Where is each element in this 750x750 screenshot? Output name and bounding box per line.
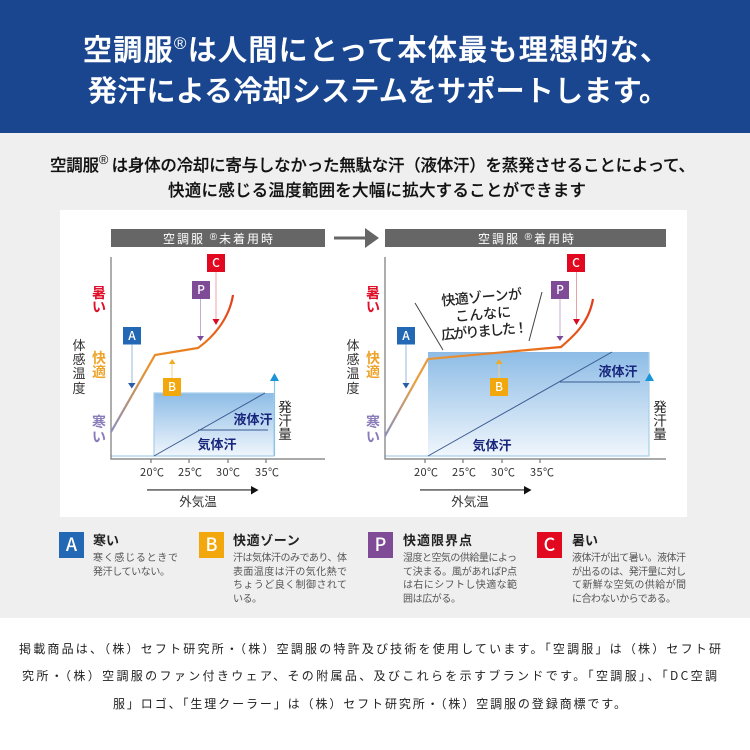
- legend text: に合わないからである。: [572, 590, 676, 605]
- intro text: 快適に感じる温度範囲を大幅に拡大することができます: [168, 177, 586, 201]
- callout: comfort zone expanded: [415, 283, 542, 350]
- callout: comfort zone expanded: 広がりました！: [440, 317, 529, 345]
- badge P: [192, 281, 210, 341]
- label: liquid sweat: 液体汗: [233, 409, 273, 428]
- legend text: 表面温度は汗の気化熱で: [233, 563, 347, 578]
- chart heading bar: 着用時: [534, 230, 574, 247]
- badge B: [490, 359, 508, 396]
- x axis tick labels: 35℃: [255, 464, 279, 480]
- label: body temperature: 感: [72, 349, 86, 368]
- label: body temperature: [72, 335, 86, 397]
- badge A: A: [128, 327, 136, 344]
- chart heading bar: [111, 229, 325, 247]
- badge C: [567, 254, 585, 325]
- intro text: ®: [99, 152, 109, 167]
- icon: B: B: [205, 531, 218, 557]
- icon: P: P: [375, 531, 386, 557]
- labels: hot comfortable cold: い: [366, 297, 380, 317]
- legend text: 囲は広がる。: [403, 590, 461, 605]
- labels: hot comfortable cold: 寒: [92, 412, 106, 432]
- chart heading bar: [385, 229, 666, 247]
- badge A: [123, 327, 141, 388]
- labels: hot comfortable cold: 適: [92, 362, 106, 382]
- sweat arrow: [645, 373, 654, 381]
- labels: hot comfortable cold: 快: [92, 348, 106, 368]
- title line 1: 空調服: [83, 27, 173, 69]
- panel: gray background: [0, 133, 750, 618]
- label: sweat amount: 発: [653, 396, 667, 416]
- labels: hot comfortable cold: 適: [366, 362, 380, 382]
- label: body temperature: 度: [72, 378, 86, 397]
- labels: hot comfortable cold: 寒: [366, 412, 380, 432]
- labels: hot comfortable cold: い: [92, 427, 106, 447]
- icon: P: [368, 531, 393, 558]
- icon: C: [537, 531, 562, 558]
- label: vapor sweat: 気体汗: [472, 435, 512, 454]
- labels: hot comfortable cold: い: [366, 427, 380, 447]
- badge A: [397, 327, 415, 388]
- sweat lines: [154, 393, 268, 456]
- x axis tick labels: 25℃: [178, 464, 202, 480]
- badge B: [163, 359, 181, 396]
- legend text: [403, 549, 517, 605]
- legend: A cold: [59, 530, 178, 578]
- legend text: [93, 549, 178, 578]
- label: sweat amount: 汗: [653, 410, 667, 430]
- legend text: 発汗していない。: [93, 563, 170, 578]
- icon: A: A: [66, 531, 78, 557]
- label: sweat amount: [653, 396, 667, 443]
- callout: comfort zone expanded: こんなに: [454, 302, 512, 326]
- chart heading bar: ®: [520, 232, 533, 243]
- badge B: B: [168, 378, 176, 395]
- legend text: 液体汗が出て暑い。液体汗: [572, 549, 686, 564]
- label: sweat amount: [278, 396, 292, 443]
- label: liquid sweat: 液体汗: [598, 361, 638, 380]
- legend text: 湿度と空気の供給量によっ: [403, 549, 517, 564]
- legend text: いる。: [233, 590, 262, 605]
- labels: hot comfortable cold: [92, 283, 106, 447]
- labels: hot comfortable cold: 暑: [92, 283, 106, 303]
- label: vapor sweat: 気体汗: [197, 434, 237, 453]
- title line 1: は人間にとって本体最も理想的な、: [188, 27, 669, 69]
- badge A: A: [402, 327, 410, 344]
- legend: P comfort limit: [368, 530, 517, 605]
- legend text: は右にシフトし快適な範: [403, 576, 517, 591]
- labels: hot comfortable cold: [366, 283, 380, 447]
- axes: [385, 257, 666, 463]
- footer trademark note: [19, 640, 721, 712]
- label: body temperature: 温: [72, 363, 86, 382]
- legend text: [572, 549, 686, 605]
- legend text: [233, 549, 347, 605]
- legend heading: 暑い: [572, 530, 598, 549]
- badge B: B: [495, 378, 503, 395]
- label: body temperature: 体: [72, 335, 86, 354]
- footer trademark note: 服」ロゴ、「生理クーラー」は（株）セフト研究所・（株）空調服の登録商標です。: [113, 695, 626, 712]
- intro text: [50, 152, 695, 201]
- axes: [111, 257, 325, 463]
- badge P: P: [556, 281, 564, 298]
- footer trademark note: 掲載商品は、（株）セフト研究所・（株）空調服の特許及び技術を使用しています。「空調服」は（株）セフト研: [19, 640, 721, 657]
- legend heading: 快適限界点: [403, 530, 473, 549]
- badge C: C: [212, 254, 220, 271]
- x axis tick labels: [414, 464, 554, 480]
- chart heading bar: 未着用時: [219, 230, 273, 247]
- chart: with cooling clothes: [346, 229, 667, 510]
- legend heading: 寒い: [93, 530, 119, 549]
- label: body temperature: 度: [346, 378, 360, 397]
- x axis tick labels: 20℃: [140, 464, 164, 480]
- panel: chart background: [60, 210, 687, 517]
- label: sweat amount: 発: [278, 396, 292, 416]
- badge P: P: [197, 281, 205, 298]
- legend text: が出るのは、発汗量に対し: [572, 563, 686, 578]
- badge P: [551, 281, 569, 341]
- labels: hot comfortable cold: 快: [366, 348, 380, 368]
- legend: B comfort zone: [199, 530, 347, 605]
- x axis arrow: [420, 486, 532, 494]
- header banner: [0, 0, 750, 133]
- legend text: 寒く感じるときで: [93, 549, 178, 564]
- chart heading bar: ®: [205, 232, 218, 243]
- icon: C: C: [544, 531, 556, 557]
- chart heading bar: 空調服: [163, 230, 203, 247]
- sweat lines: [428, 352, 640, 456]
- label: sweat amount: 量: [653, 423, 667, 443]
- intro text: は身体の冷却に寄与しなかった無駄な汗（液体汗）を蒸発させることによって、: [108, 152, 695, 176]
- labels: hot comfortable cold: 暑: [366, 283, 380, 303]
- badge C: [207, 254, 225, 325]
- label: body temperature: [346, 335, 360, 397]
- intro text: 空調服: [50, 152, 99, 176]
- labels: hot comfortable cold: い: [92, 297, 106, 317]
- callout: comfort zone expanded: 快適ゾーンが: [440, 284, 523, 311]
- sweat arrow: [270, 373, 279, 456]
- legend heading: 快適ゾーン: [233, 530, 300, 549]
- label: sweat amount: 汗: [278, 410, 292, 430]
- x axis arrow: [147, 486, 258, 494]
- x axis title: 外気温: [451, 491, 489, 510]
- legend text: て新鮮な空気の供給が間: [572, 576, 686, 591]
- badge C: C: [572, 254, 580, 271]
- footer trademark note: 究所・（株）空調服のファン付きウェア、その附属品、及びこれらを示すブランドです。「空調服」、「DC空調: [22, 667, 717, 684]
- legend text: ちょうど良く制御されて: [233, 576, 347, 591]
- label: body temperature: 温: [346, 363, 360, 382]
- x axis tick labels: 30℃: [216, 464, 240, 480]
- temperature curve: [385, 299, 593, 436]
- label: body temperature: 感: [346, 349, 360, 368]
- title line 2: 発汗による冷却システムをサポートします。: [88, 68, 668, 110]
- legend text: て決まる。風があればP点: [403, 563, 517, 578]
- chart heading bar: 空調服: [478, 230, 518, 247]
- x axis tick labels: 35℃: [530, 464, 554, 480]
- x axis tick labels: 20℃: [414, 464, 438, 480]
- legend: C hot: [537, 530, 686, 605]
- temperature curve: [111, 295, 233, 432]
- x axis tick labels: [140, 464, 279, 480]
- label: sweat amount: 量: [278, 423, 292, 443]
- arrow: before to after: [334, 228, 379, 248]
- chart: without cooling clothes: [72, 229, 325, 510]
- title line 1: ®: [174, 34, 187, 53]
- x axis title: 外気温: [179, 491, 217, 510]
- x axis tick labels: 25℃: [452, 464, 476, 480]
- label: body temperature: 体: [346, 335, 360, 354]
- sweat area: [428, 352, 649, 456]
- x axis tick labels: 30℃: [491, 464, 515, 480]
- icon: B: [199, 531, 224, 558]
- sweat area: [154, 393, 274, 456]
- legend text: 汗は気体汗のみであり、体: [233, 549, 347, 564]
